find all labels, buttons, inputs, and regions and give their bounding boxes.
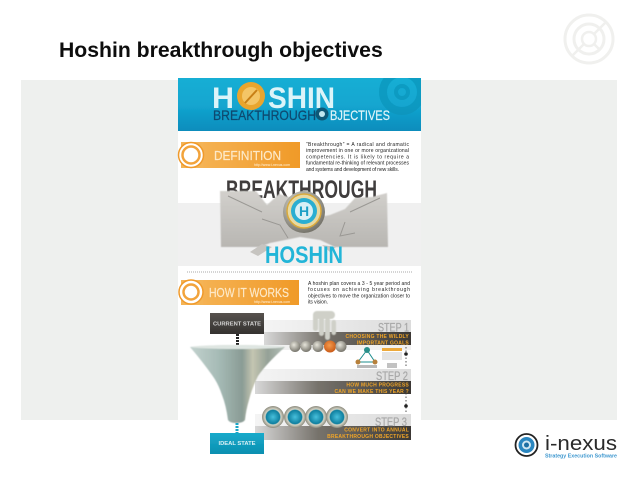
how it works text: focuses on achieving breakthrough (308, 287, 410, 293)
step 3: CONVERT INTO ANNUAL (344, 428, 409, 434)
breakthrough illustration (220, 176, 388, 269)
step 3: BREAKTHROUGH OBJECTIVES (327, 434, 409, 440)
definition text: improvement in one or more organizational (306, 148, 409, 154)
definition text: fundamental re-thinking of relevant processes (306, 160, 410, 166)
definition text: and systems and development of new skills. (306, 167, 399, 173)
how it works text: objectives to move the organization closer to (308, 294, 410, 300)
step 2: CAN WE MAKE THIS YEAR ? (334, 389, 409, 395)
goals table (382, 348, 402, 368)
how it works text: its vision. (308, 300, 328, 306)
infographic background (178, 131, 421, 460)
connector: current state to funnel (236, 334, 239, 345)
goal balls (290, 340, 346, 352)
HOSHIN heading: H (212, 82, 234, 115)
i-nexus logo (516, 433, 617, 460)
H sphere (283, 191, 325, 233)
step 2: STEP 2 (376, 369, 408, 383)
logo mark (516, 434, 538, 456)
infographic header banner: SHIN (268, 82, 335, 115)
how it works badge (179, 280, 299, 305)
header gear decoration (383, 73, 421, 111)
step 1 (264, 320, 411, 350)
watermark target logo (565, 15, 613, 63)
step 1: STEP 1 (378, 320, 409, 334)
orange emblem (237, 82, 265, 110)
step connector dots (404, 347, 408, 414)
how it works text (308, 281, 410, 306)
grey content panel (21, 80, 617, 420)
definition badge (178, 142, 300, 168)
rubble (250, 244, 336, 256)
how it works badge: HOW IT WORKS (209, 286, 289, 300)
BREAKTHROUGH word: BREAKTHROUGH (226, 176, 377, 204)
ideal state box (210, 433, 264, 454)
hand picking goal (313, 311, 336, 340)
infographic (178, 73, 421, 460)
how it works badge: http://www.i-nexus.com (254, 300, 290, 304)
logo wordmark: i-nexus (545, 433, 617, 455)
step 1: CHOOSING THE WILDLY (346, 334, 409, 340)
logo tagline: Strategy Execution Software (545, 454, 617, 460)
ideal state box: IDEAL STATE (218, 441, 256, 447)
HOSHIN word: HOSHIN (265, 242, 343, 269)
current state box: CURRENT STATE (213, 322, 261, 328)
how it works text: A hoshin plan covers a 3 - 5 year period and (308, 281, 410, 287)
step 3: STEP 3 (375, 415, 407, 429)
definition text (306, 142, 410, 173)
step 3 (255, 414, 411, 440)
infographic header banner: BJECTIVES (330, 107, 390, 123)
blue objective balls (262, 406, 348, 428)
slide title: Hoshin breakthrough objectives (59, 39, 383, 62)
step 2 (255, 369, 411, 395)
dotted divider (187, 271, 412, 273)
current state box (210, 313, 264, 334)
H sphere: H (299, 203, 309, 219)
infographic header banner (178, 73, 421, 131)
definition badge: http://www.i-nexus.com (254, 163, 290, 167)
connector: funnel to ideal state (236, 423, 238, 433)
BREAKTHROUGH OBJECTIVES subheading: BREAKTHROUGH (213, 107, 316, 123)
funnel (190, 345, 285, 423)
step 1: IMPORTANT GOALS (357, 340, 409, 346)
definition text: competencies. It is likely to require a (306, 154, 409, 160)
step 2: HOW MUCH PROGRESS (346, 382, 409, 388)
cracked wall (220, 191, 388, 247)
definition badge: DEFINITION (214, 148, 281, 163)
definition text: “Breakthrough” = A radical and dramatic (306, 142, 410, 148)
strategy triangle diagram (356, 347, 378, 368)
